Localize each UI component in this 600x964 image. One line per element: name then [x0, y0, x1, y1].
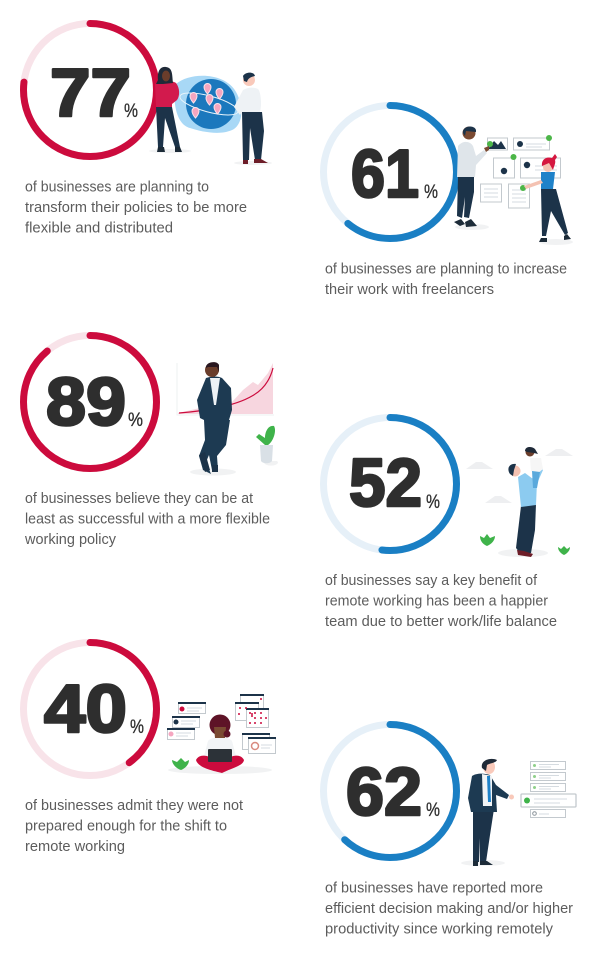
caption: remote working has been a happier	[325, 594, 548, 610]
ring: 40%	[24, 642, 156, 776]
illustration: man with growth chart and plant	[177, 362, 278, 476]
caption: of businesses are planning to increase	[325, 262, 567, 278]
percent sign: %	[128, 410, 143, 431]
caption: least as successful with a more flexible	[25, 512, 270, 528]
caption: of businesses say a key benefit of	[325, 573, 538, 589]
illustration: parent lifting child	[466, 447, 573, 557]
caption: working policy	[24, 532, 117, 548]
panel: 61%	[324, 106, 573, 298]
percent sign: %	[124, 101, 138, 122]
caption: remote working	[25, 839, 125, 855]
illustration: businessman choosing from list	[461, 759, 576, 866]
caption: transform their policies to be more	[25, 200, 247, 216]
caption: of businesses are planning to	[25, 180, 209, 196]
percent sign: %	[426, 492, 440, 513]
caption: team due to better work/life balance	[325, 614, 557, 630]
caption: of businesses believe they can be at	[25, 491, 253, 507]
panel: 52%	[324, 418, 573, 630]
panel: 40%	[24, 642, 276, 855]
number: 62: 62	[346, 754, 422, 830]
caption	[325, 880, 573, 938]
ring: 61%	[324, 106, 456, 238]
caption	[25, 180, 247, 236]
caption: productivity since working remotely	[325, 922, 554, 938]
illustration: two people reviewing cards	[454, 126, 573, 245]
ring: 52%	[324, 418, 456, 550]
caption: of businesses have reported more	[325, 880, 543, 896]
percent sign: %	[424, 182, 438, 203]
percent sign: %	[130, 717, 144, 738]
illustration: two people and globe	[149, 67, 272, 165]
number: 40: 40	[44, 671, 127, 747]
ring: 77%	[24, 24, 156, 156]
caption	[325, 573, 557, 630]
caption: prepared enough for the shift to	[25, 818, 227, 834]
caption	[25, 798, 243, 855]
ring: 89%	[24, 336, 156, 468]
caption	[325, 262, 567, 298]
caption: efficient decision making and/or higher	[325, 901, 573, 917]
illustration: woman with laptop and dashboards	[167, 694, 276, 774]
caption: of businesses admit they were not	[25, 798, 243, 814]
number: 89: 89	[46, 364, 126, 440]
number: 77: 77	[50, 55, 131, 131]
panel: 62%	[324, 724, 576, 938]
caption	[24, 491, 270, 548]
panel: 89%	[24, 336, 278, 548]
caption: their work with freelancers	[325, 282, 494, 298]
number: 52: 52	[349, 445, 422, 521]
ring: 62%	[324, 724, 456, 858]
number: 61: 61	[351, 136, 419, 212]
panel: 77%	[24, 24, 272, 236]
caption: flexible and distributed	[25, 220, 173, 236]
percent sign: %	[426, 800, 440, 821]
